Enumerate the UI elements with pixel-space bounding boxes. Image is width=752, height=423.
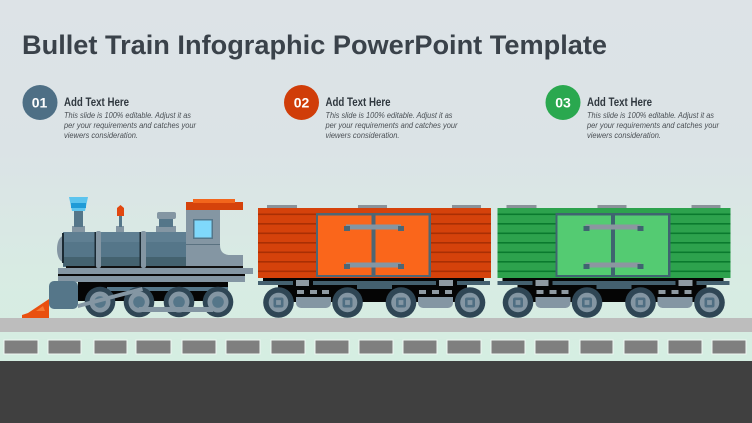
front box [49,281,78,309]
item 03 body [586,110,720,140]
badge 03 [546,85,580,120]
cab [186,199,243,268]
connecting rods [78,287,213,312]
item 03 body: per your requirements and catches your [586,120,720,130]
item 02 body: This slide is 100% editable. Adjust it as [326,110,453,120]
door [316,213,431,277]
badge 02: 02 [294,94,309,110]
item 02 body: per your requirements and catches your [325,120,458,130]
boiler [57,231,186,268]
locomotive [22,197,253,318]
chimney [69,197,88,232]
road [0,361,752,423]
wagon: green [498,205,730,318]
wagon wheels [503,287,725,318]
badge 02 [284,85,319,120]
item 03 body: viewers consideration. [587,130,661,140]
tabs [506,205,720,209]
item 01 [22,85,197,140]
deck [58,268,253,282]
wagon body [498,208,730,278]
undercarriage [498,278,730,308]
ground strip [0,318,752,332]
item 03 [546,85,720,140]
undercarriage [258,278,490,308]
railway sleepers [4,340,746,354]
item 03 heading: Add Text Here [587,97,652,109]
steam dome [156,212,176,232]
item 01 body: viewers consideration. [64,130,138,140]
item 02 body: viewers consideration. [326,130,400,140]
wagon wheels [263,287,485,318]
badge 03: 03 [555,94,571,110]
wagon: orange [258,205,491,318]
item 02 heading: Add Text Here [326,97,390,109]
chassis [78,282,228,301]
whistle [116,205,124,232]
badge 01: 01 [32,94,47,110]
door [556,213,670,277]
item 01 body: per your requirements and catches your [63,120,197,130]
item 03 body: This slide is 100% editable. Adjust it as [587,110,715,120]
item 01 heading: Add Text Here [64,97,129,109]
item 01 body [63,110,197,140]
item 02 body [325,110,458,140]
item 02 [284,85,458,140]
wagon body [258,208,491,278]
title: Bullet Train Infographic PowerPoint Template [22,30,607,60]
badge 01 [22,85,58,120]
item 01 body: This slide is 100% editable. Adjust it as [64,110,192,120]
tabs [267,205,481,209]
cow catcher [22,299,49,318]
wheels [85,287,233,317]
